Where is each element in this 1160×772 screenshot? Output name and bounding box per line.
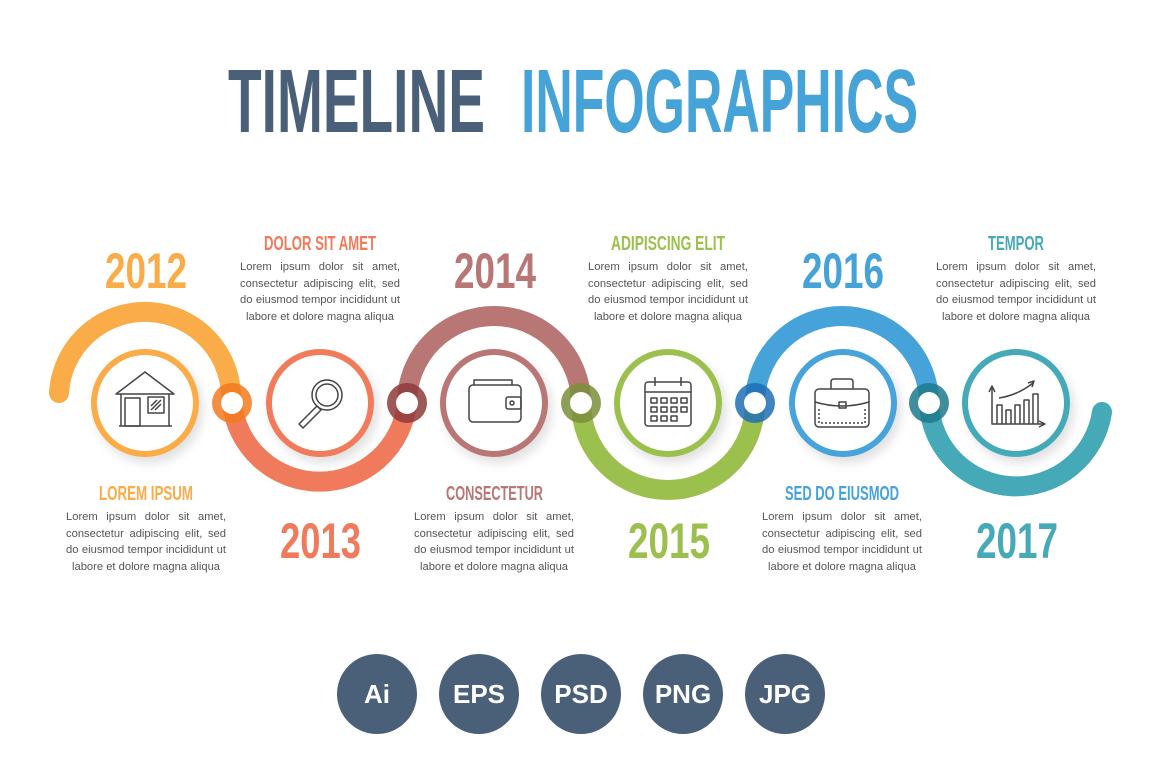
headings: ADIPISCING ELIT — [611, 233, 725, 255]
timeline wave — [59, 312, 1102, 490]
icon: wallet — [469, 380, 521, 422]
years: 2017 — [976, 513, 1058, 569]
icon: chart — [989, 381, 1045, 427]
icons — [116, 372, 1045, 428]
years: 2014 — [454, 243, 536, 299]
icon: calendar — [645, 377, 691, 426]
headings: SED DO EIUSMOD — [785, 483, 899, 505]
text: lorem ipsum: Lorem ipsum dolor sit amet, consectetur adipiscing elit, sed do eiusmod tempor incididunt ut labore et dolore magna aliqua — [66, 511, 226, 573]
years: 2012 — [105, 243, 187, 299]
format badges: EPS — [453, 679, 505, 709]
headings: DOLOR SIT AMET — [264, 233, 376, 255]
years: 2015 — [628, 513, 710, 569]
icon: briefcase — [815, 379, 869, 427]
format badges: PSD — [554, 679, 608, 709]
icon: magnifier — [299, 380, 342, 428]
text: consectetur: Lorem ipsum dolor sit amet, consectetur adipiscing elit, sed do eiusmod tempor incididunt ut labore et dolore magna aliqua — [414, 511, 574, 573]
headings: LOREM IPSUM — [99, 483, 193, 505]
text: sed do eiusmod: Lorem ipsum dolor sit amet, consectetur adipiscing elit, sed do eiusmod tempor incididunt ut labore et dolore magna aliqua — [762, 511, 922, 573]
format badges: PNG — [655, 679, 711, 709]
icon: house — [116, 372, 174, 426]
years: 2013 — [280, 513, 361, 569]
format badges: Ai — [364, 679, 390, 709]
headings — [99, 233, 1044, 505]
format badges — [337, 654, 825, 734]
headings: CONSECTETUR — [446, 483, 543, 505]
text: tempor: Lorem ipsum dolor sit amet, consectetur adipiscing elit, sed do eiusmod tempor incididunt ut labore et dolore magna aliqua — [936, 261, 1096, 323]
title — [228, 52, 918, 152]
text: dolor sit amet: Lorem ipsum dolor sit amet, consectetur adipiscing elit, sed do eiusmod tempor incididunt ut labore et dolore magna aliqua — [240, 261, 400, 323]
title: TIMELINE — [228, 52, 485, 152]
step circles — [94, 352, 1067, 454]
connector dots — [212, 383, 949, 423]
headings: TEMPOR — [988, 233, 1044, 255]
text: adipiscing elit: Lorem ipsum dolor sit amet, consectetur adipiscing elit, sed do eiusmod tempor incididunt ut labore et dolore magna aliqua — [588, 261, 748, 323]
years — [105, 243, 1058, 569]
format badges: JPG — [759, 679, 811, 709]
years: 2016 — [802, 243, 884, 299]
